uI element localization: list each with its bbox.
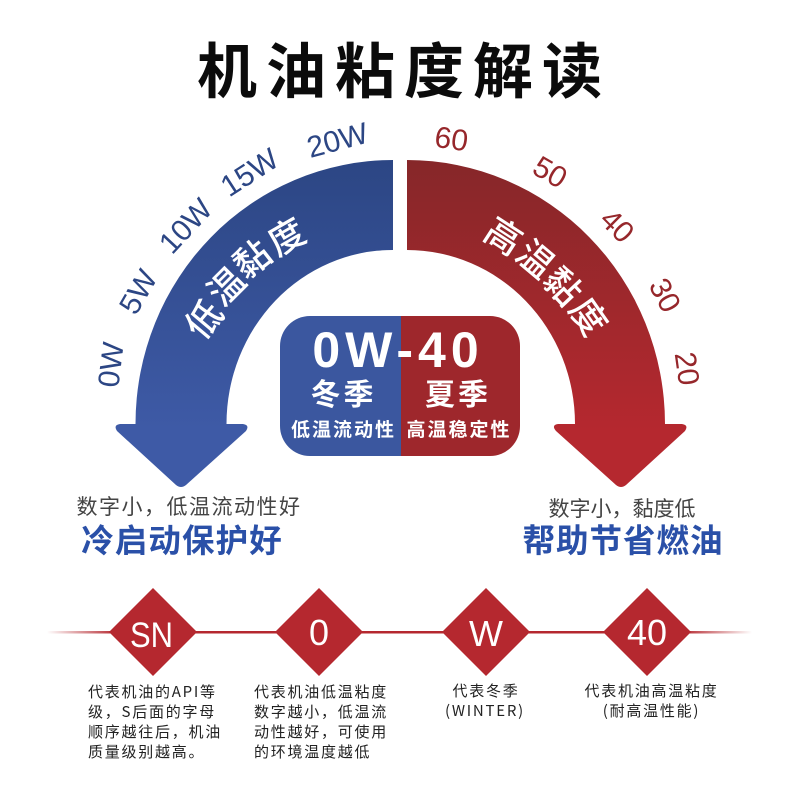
right note: 数字小，黏度低 xyxy=(548,493,696,523)
description: SN xyxy=(88,681,222,762)
arrow label: 高温黏度: 度 xyxy=(559,286,622,345)
description: 0: 动性越好，可使用 xyxy=(254,721,388,742)
high temperature stability label: 高温稳定性 xyxy=(406,415,512,442)
description: SN: 顺序越往后，机油 xyxy=(88,721,222,742)
diamond: 0 xyxy=(275,588,363,676)
arrow label: 低温黏度: 度 xyxy=(257,203,314,267)
description: SN: 质量级别越高。 xyxy=(88,741,205,762)
high temperature scale xyxy=(433,121,705,387)
description: 40 xyxy=(584,680,719,721)
left note xyxy=(76,491,302,562)
diamond: W xyxy=(442,588,530,676)
description: 0: 代表机油低温粘度 xyxy=(254,681,388,702)
description: W: 代表冬季 xyxy=(452,680,520,701)
description: SN: 级，S后面的字母 xyxy=(88,701,216,722)
timeline line xyxy=(47,631,752,634)
high temperature scale: 20 xyxy=(668,350,705,387)
arrow label: 低温黏度: 黏 xyxy=(221,226,281,289)
winter label: 冬季 xyxy=(310,370,376,414)
arrow label: 高温黏度: 温 xyxy=(506,226,567,289)
high temperature scale: 60 xyxy=(433,121,470,158)
description: W: (WINTER) xyxy=(445,700,525,721)
right benefit: 帮助节省燃油 xyxy=(522,515,724,562)
low temperature scale: 5W xyxy=(113,264,165,320)
low temperature scale: 0W xyxy=(92,340,131,389)
grade 0W-40: 0W-40 xyxy=(312,322,484,378)
diamond: SN: SN xyxy=(130,616,173,655)
summer label: 夏季 xyxy=(425,370,491,414)
high temperature scale: 50 xyxy=(527,150,572,195)
description: 40: 代表机油高温粘度 xyxy=(584,680,719,701)
arrow label: 高温黏度: 高 xyxy=(475,203,534,266)
low temperature scale: 15W xyxy=(215,142,285,204)
arrow label: 高温黏度 xyxy=(475,203,622,345)
arrow: high temperature viscosity xyxy=(407,160,686,487)
description: 0 xyxy=(254,681,388,762)
center badge 0W-40 xyxy=(280,316,520,456)
right note xyxy=(522,493,724,562)
description: 0: 的环境温度越低 xyxy=(254,741,371,762)
diamond: SN xyxy=(109,588,197,676)
low temperature flow label: 低温流动性 xyxy=(291,415,396,442)
left benefit: 冷启动保护好 xyxy=(81,515,283,562)
high temperature scale: 40 xyxy=(593,203,640,250)
diamond: W: W xyxy=(469,613,503,654)
title: 机油粘度解读 xyxy=(197,24,611,111)
arrow label: 低温黏度: 低 xyxy=(171,288,234,349)
description: SN: 代表机油的API等 xyxy=(88,681,217,702)
diamond: 40 xyxy=(603,588,691,676)
arrow label: 高温黏度: 黏 xyxy=(533,254,595,316)
left note: 数字小，低温流动性好 xyxy=(76,491,302,521)
arrow label: 低温黏度 xyxy=(171,203,314,349)
diamond: 0: 0 xyxy=(309,612,329,653)
diamond: 40: 40 xyxy=(627,612,667,653)
description: 0: 数字越小，低温流 xyxy=(254,701,388,722)
arrow label: 低温黏度: 温 xyxy=(194,254,256,316)
low temperature scale: 10W xyxy=(153,192,220,260)
arrow: low temperature viscosity xyxy=(116,160,393,487)
description: W xyxy=(445,680,525,721)
high temperature scale: 30 xyxy=(642,273,687,318)
description: 40: (耐高温性能) xyxy=(603,700,700,721)
low temperature scale: 20W xyxy=(303,117,372,165)
low temperature scale xyxy=(92,117,372,389)
